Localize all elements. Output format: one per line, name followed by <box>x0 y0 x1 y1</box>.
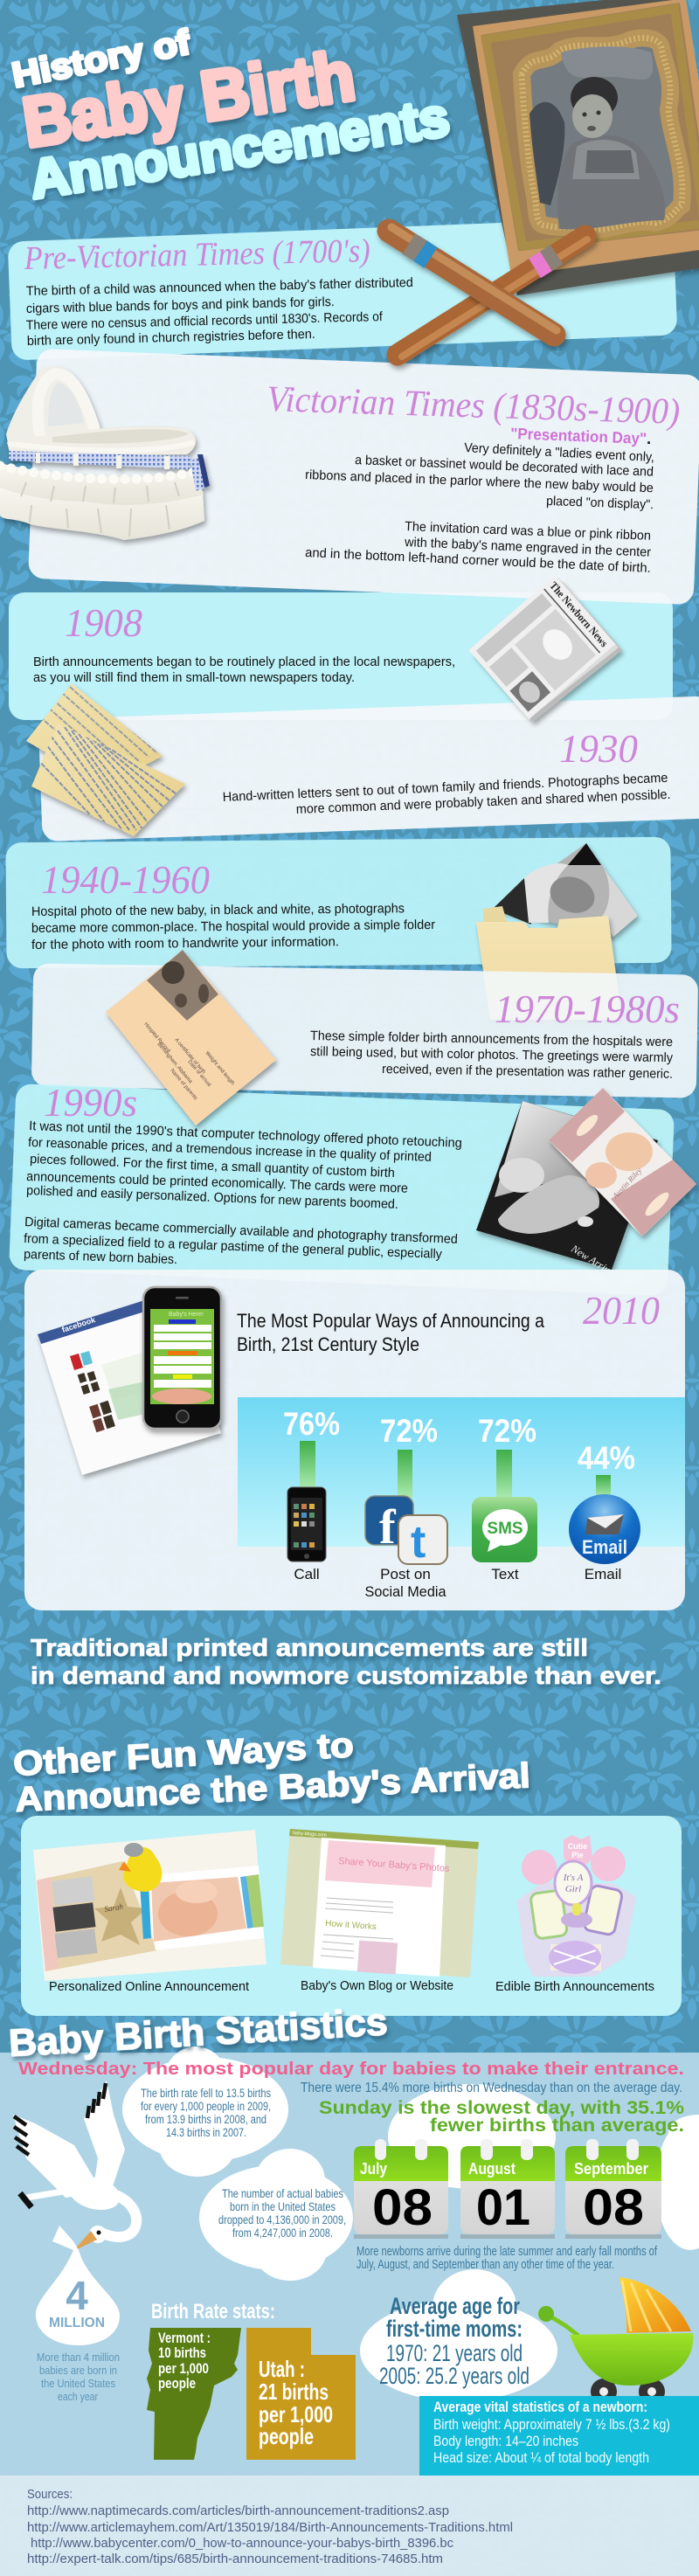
text block: 1990s description: Digital cameras became commercially available and photography transformed <box>24 1215 458 1247</box>
text block: sources list: http://expert-talk.com/tips/685/birth-announcement-traditions-74685.htm <box>27 2552 443 2566</box>
icon: baby photo in a hospital folder <box>476 843 638 1020</box>
text block: 1908 description: as you will still find them in small-town newspapers today. <box>33 670 355 685</box>
text block: average age for first-time moms <box>379 2293 529 2389</box>
icon: baby foot photo and printed card <box>476 1088 696 1280</box>
icon: facebook <box>365 1496 413 1555</box>
text block: average age for first-time moms: 1970: 21 years old <box>386 2340 523 2366</box>
icon: calendar July <box>354 2139 448 2239</box>
heading: Victorian Times: Victorian Times (1830s-1900) <box>266 379 681 433</box>
caption: Personalized Online Announcement <box>49 1980 249 1994</box>
text block: Victorian description: and in the bottom left-hand corner would be the date of birth. <box>305 545 651 576</box>
label: email: Email <box>585 1566 621 1582</box>
panel: statistics background <box>0 2053 699 2476</box>
icon: facebook page and baby app phone <box>38 1287 221 1475</box>
map: Utah: Utah : <box>259 2356 305 2382</box>
panel: newborn vital statistics: Body length: 14–20 inches <box>433 2433 578 2449</box>
printed pink card: Austin Riley <box>610 1167 643 1201</box>
bar: call <box>300 1441 315 1488</box>
icon: hospital folder announcement card: Hospital Record <box>142 1021 171 1054</box>
panel: 1990s <box>9 1080 675 1296</box>
caption: Baby's Own Blog or Website <box>301 1979 453 1993</box>
label: text: Text <box>491 1566 519 1582</box>
text block: sources list: http://www.naptimecards.com/articles/birth-announcement-traditions2.asp <box>27 2503 449 2518</box>
map: Utah: per 1,000 <box>259 2401 333 2427</box>
text block: average age for first-time moms: Average age for <box>390 2293 520 2319</box>
icon: newspaper: The Newborn News <box>547 579 611 649</box>
text block: Victorian description: a basket or bassinet would be decorated with lace and <box>355 453 654 480</box>
icon: crossed cigars <box>389 227 587 357</box>
heading: Pre-Victorian Times: Pre-Victorian Times (1700's) <box>23 232 370 277</box>
icon: hand-written letters <box>26 683 185 836</box>
heading: most popular ways: Birth, 21st Century Style <box>237 1333 419 1355</box>
map: Utah <box>246 2328 356 2460</box>
text block: 1930 description: more common and were probably taken and shared when possible. <box>295 787 671 817</box>
text block: 4 million detail: each year <box>58 2390 99 2403</box>
heading: most popular ways <box>237 1310 545 1355</box>
clouds behind statistics <box>122 2046 699 2401</box>
text block: Victorian description: placed "on display". <box>546 494 654 512</box>
callout: traditional printed announcements: in demand and nowmore customizable than ever. <box>31 1662 661 1689</box>
icon: antique framed baby portrait <box>457 0 699 295</box>
text block: actual babies cloud: born in the United States <box>230 2200 336 2213</box>
heading: 1940-1960: 1940-1960 <box>41 857 210 902</box>
cigar with pink band <box>398 236 587 357</box>
callout: traditional printed announcements <box>31 1634 661 1689</box>
text block: 1908 description: Birth announcements began to be routinely placed in the local newspapers, <box>33 654 455 669</box>
panel: newborn vital statistics <box>419 2396 699 2476</box>
icon: hospital folder announcement card: Name of parents <box>169 1068 198 1101</box>
heading: other fun ways <box>12 1726 531 1819</box>
text block: 1990s description: announcements could be printed economically. The cards were more <box>26 1169 408 1196</box>
panel: Victorian times <box>28 349 699 605</box>
text block: 4 million detail: babies are born in <box>39 2364 117 2377</box>
image: baby blog website: How it Works <box>325 1919 377 1932</box>
value: 72% social: 72% <box>380 1413 438 1449</box>
subheading: Presentation Day: . <box>647 430 651 447</box>
heading: Wednesday most popular day: Wednesday: The most popular day for babies to make their entrance. <box>18 2059 684 2079</box>
phone: Baby's Here! <box>169 1312 204 1318</box>
panel: newborn vital statistics: Head size: About ¼ of total body length <box>433 2449 649 2466</box>
text block: Victorian description: Very definitely a "ladies event only, <box>464 440 654 465</box>
heading: 1930: 1930 <box>559 726 638 771</box>
value: 44%: 44% <box>578 1440 635 1476</box>
icon: email: Email <box>582 1536 627 1558</box>
text block: Victorian description: with the baby's name engraved in the center <box>404 535 651 560</box>
title line: Baby Birth: Baby Birth <box>18 37 359 162</box>
phone <box>143 1287 221 1429</box>
card baby photo <box>147 950 218 1021</box>
title line: History of: History of <box>9 23 194 95</box>
callout: traditional printed announcements: Traditional printed announcements are still <box>31 1634 588 1661</box>
text block: birth rate cloud: from 13.9 births in 2008, and <box>145 2113 266 2126</box>
value: 72% text: 72% <box>478 1413 536 1449</box>
photo caption: New Arrival <box>569 1242 619 1280</box>
text block: pre-Victorian description <box>26 275 413 349</box>
text block: 1990s description: parents of new born babies. <box>24 1247 177 1267</box>
heading: other fun ways: Other Fun Ways to <box>12 1726 355 1783</box>
printed pink card <box>549 1088 696 1236</box>
text block: 4 million detail: the United States <box>41 2377 115 2390</box>
heading: baby birth statistics: Baby Birth Statistics <box>8 2000 389 2065</box>
image: edible birth announcements bouquet <box>495 1835 654 1994</box>
image: baby blog website: baby-blogs.com <box>293 1831 327 1839</box>
label: post on social media <box>365 1566 446 1600</box>
text block: 4 million detail <box>37 2351 120 2403</box>
image: personalized online announcement <box>33 1830 266 1994</box>
panel: newborn vital statistics: Average vital statistics of a newborn: <box>433 2399 647 2415</box>
icon: phone call <box>287 1487 326 1562</box>
image: personalized online announcement: Sarah <box>104 1901 124 1914</box>
upper skirt tier <box>0 463 204 505</box>
text block: calendar note <box>356 2245 658 2272</box>
text block: birth rate cloud: The birth rate fell to 13.5 births <box>141 2087 271 2100</box>
bib cookie text: Cutie <box>568 1842 587 1851</box>
blog headline: Share Your Baby's Photos <box>338 1856 450 1874</box>
icon: stork carrying bundle <box>13 2081 136 2345</box>
panel: 1930 <box>38 696 699 841</box>
icon: twitter: t <box>411 1517 426 1568</box>
map: Vermont: Vermont : <box>158 2330 211 2346</box>
text block: pre-Victorian description: cigars with blue bands for boys and pink bands for girls. <box>26 294 335 316</box>
text block: 1990s description: pieces followed. For the first time, a small quantity of custom birth <box>30 1152 395 1181</box>
stat: 4 million <box>49 2273 105 2330</box>
lower skirt tier <box>0 485 204 540</box>
map: Utah: 21 births <box>259 2379 329 2405</box>
text block: pre-Victorian description: birth are only found in church registries before then. <box>27 327 315 349</box>
panel: other fun ways <box>21 1816 682 2016</box>
text block: 1990s description: It was not until the 1990's that computer technology offered photo retouching <box>29 1118 462 1151</box>
text block: 1970-1980s description: received, even if the presentation was rather generic. <box>382 1062 673 1082</box>
heading: 1990s: 1990s <box>44 1080 137 1125</box>
text block: actual babies cloud: from 4,247,000 in 2008. <box>232 2226 333 2240</box>
image: baby blog website <box>280 1829 479 1993</box>
icon: hospital folder announcement card: Birmingham, Alabama <box>156 1042 193 1085</box>
heading: 1908: 1908 <box>65 600 142 645</box>
icon: calendar July: 08 <box>372 2179 433 2236</box>
text block: 1990s description <box>24 1118 462 1267</box>
icon: calendar September <box>565 2139 661 2239</box>
stat: 4 million: 4 <box>66 2273 88 2318</box>
bar chart: most popular ways <box>238 1397 685 1600</box>
text block: sources list: Sources: <box>27 2487 73 2502</box>
heading: other fun ways: Announce the Baby's Arrival <box>14 1756 531 1819</box>
text block: average age for first-time moms: first-time moms: <box>386 2316 523 2342</box>
icon: facebook: f <box>379 1500 397 1555</box>
bar: social <box>398 1450 412 1498</box>
text block: sources list: http://www.articlemayhem.com/Art/135019/184/Birth-Announcements-Traditions.html <box>27 2520 513 2535</box>
icon: hospital folder announcement card <box>106 950 276 1125</box>
panel: 1908 <box>9 592 673 720</box>
subheading: Presentation Day: "Presentation Day" <box>510 425 647 447</box>
text block: 1970-1980s description: These simple folder birth announcements from the hospitals were <box>310 1028 673 1049</box>
duck <box>123 1847 162 1892</box>
facebook screenshot: facebook <box>61 1315 97 1334</box>
heading: 1970-1980s: 1970-1980s <box>495 987 680 1031</box>
heading: most popular ways: The Most Popular Ways of Announcing a <box>237 1310 545 1332</box>
text block: pre-Victorian description: The birth of a child was announced when the baby's father distributed <box>26 275 413 299</box>
map: Vermont: per 1,000 <box>158 2360 209 2377</box>
text block: Victorian description <box>305 440 654 576</box>
text block: Victorian description: ribbons and placed in the parlor where the new baby would be <box>305 467 654 495</box>
main title <box>9 23 453 211</box>
text block: actual babies cloud: The number of actual babies <box>222 2187 343 2200</box>
round cookie text: It's A <box>563 1873 584 1883</box>
map: Utah: people <box>259 2423 314 2449</box>
text block: 1970-1980s description <box>310 1028 674 1082</box>
text block: actual babies cloud <box>218 2187 346 2240</box>
cigar with blue band <box>389 227 557 335</box>
heading: birth rate stats: Birth Rate stats: <box>151 2300 275 2323</box>
value: 76%: 76% <box>283 1406 340 1442</box>
bar: email <box>596 1475 611 1498</box>
text block: 1970-1980s description: still being used, but with color photos. The greetings were warmly <box>310 1044 674 1065</box>
label: call: Call <box>294 1566 320 1582</box>
text block: actual babies cloud: dropped to 4,136,000 in 2009, <box>218 2213 346 2226</box>
text block: 1990s description: polished and easily personalized. Options for new parents boomed. <box>26 1183 398 1212</box>
icon: hospital folder announcement card: Date of arrival <box>186 1059 211 1088</box>
icon: twitter <box>398 1515 447 1568</box>
text block: pre-Victorian description: There were no census and official records until 1830's. Records of <box>26 309 384 333</box>
text block: average age for first-time moms: 2005: 25.2 years old <box>379 2363 529 2389</box>
icon: hospital folder announcement card: Weight and length <box>204 1050 235 1086</box>
icon: calendar July: July <box>360 2160 387 2178</box>
icon: white bassinet <box>0 366 210 540</box>
text block: calendar note: July, August, and September than any other time of the year. <box>356 2258 614 2272</box>
icon: SMS: SMS <box>487 1520 523 1538</box>
text block: 1930 description: Hand-written letters sent to out of town family and friends. Photographs became <box>222 771 668 805</box>
round cookie text: Girl <box>565 1884 581 1894</box>
map: Vermont: 10 births <box>158 2344 206 2361</box>
stat: 4 million: MILLION <box>49 2316 105 2330</box>
panel: 1940-1960 <box>5 837 672 968</box>
text block: birth rate cloud: 14.3 births in 2007. <box>166 2126 246 2139</box>
caption: Edible Birth Announcements <box>495 1980 654 1994</box>
icon: calendar August <box>460 2139 555 2239</box>
text block: sources list: http://www.babycenter.com/0_how-to-announce-your-babys-birth_8396.bc <box>31 2536 453 2551</box>
text block: Victorian description: The invitation card was a blue or pink ribbon <box>405 519 651 544</box>
title line: Announcements: Announcements <box>26 87 453 211</box>
baby foot photo <box>476 1101 658 1280</box>
facebook screenshot <box>38 1291 221 1475</box>
icon: SMS <box>472 1497 537 1562</box>
icon: calendar September: 08 <box>583 2179 644 2236</box>
text block: birth rate cloud: for every 1,000 people in 2009, <box>141 2100 271 2113</box>
icon: calendar August: August <box>468 2160 516 2178</box>
icon: green stroller <box>538 2277 693 2405</box>
heading: Sunday slowest day <box>319 2098 684 2136</box>
text block: 1940-1960 description: Hospital photo of the new baby, in black and white, as photographs <box>31 901 405 919</box>
icon: newspaper <box>468 575 622 722</box>
text block: birth rate cloud <box>141 2087 271 2139</box>
map: Vermont: people <box>158 2375 196 2392</box>
panel: 2010 <box>24 1270 685 1610</box>
text block: 1940-1960 description: for the photo with room to handwrite your information. <box>31 934 339 952</box>
heading: Sunday slowest day: Sunday is the slowest day, with 35.1% <box>319 2098 684 2118</box>
portrait scalloped ornament <box>522 38 682 229</box>
text block: 1990s description: for reasonable prices, and a tremendous increase in the quality of printed <box>28 1135 432 1165</box>
text block: 1990s description: from a specialized field to a regular pastime of the general public, especially <box>24 1231 443 1262</box>
heading: Sunday slowest day: fewer births than average. <box>430 2116 684 2136</box>
icon: email <box>569 1494 640 1564</box>
text block: 1940-1960 description <box>31 901 435 952</box>
icon: calendar August: 01 <box>476 2179 530 2236</box>
text block: 1940-1960 description: became more common-place. The hospital would provide a simple folder <box>31 918 435 936</box>
bar: text <box>496 1450 512 1498</box>
heading: 2010: 2010 <box>583 1288 660 1333</box>
text block: 4 million detail: More than 4 million <box>37 2351 120 2364</box>
icon: calendar September: September <box>574 2160 648 2178</box>
icon: hospital folder announcement card: A certificate of birth <box>173 1037 206 1075</box>
bib cookie text: Pie <box>571 1851 584 1859</box>
text block: 1908 description <box>33 654 455 685</box>
panel: pre-Victorian times <box>8 216 677 361</box>
label: post on social media: Post on <box>380 1566 431 1582</box>
map: Vermont <box>147 2328 241 2460</box>
text block: sources list <box>27 2487 513 2566</box>
panel: 1970-1980s <box>31 963 698 1098</box>
panel: sources footer <box>0 2476 699 2576</box>
label: post on social media: Social Media <box>365 1583 446 1600</box>
